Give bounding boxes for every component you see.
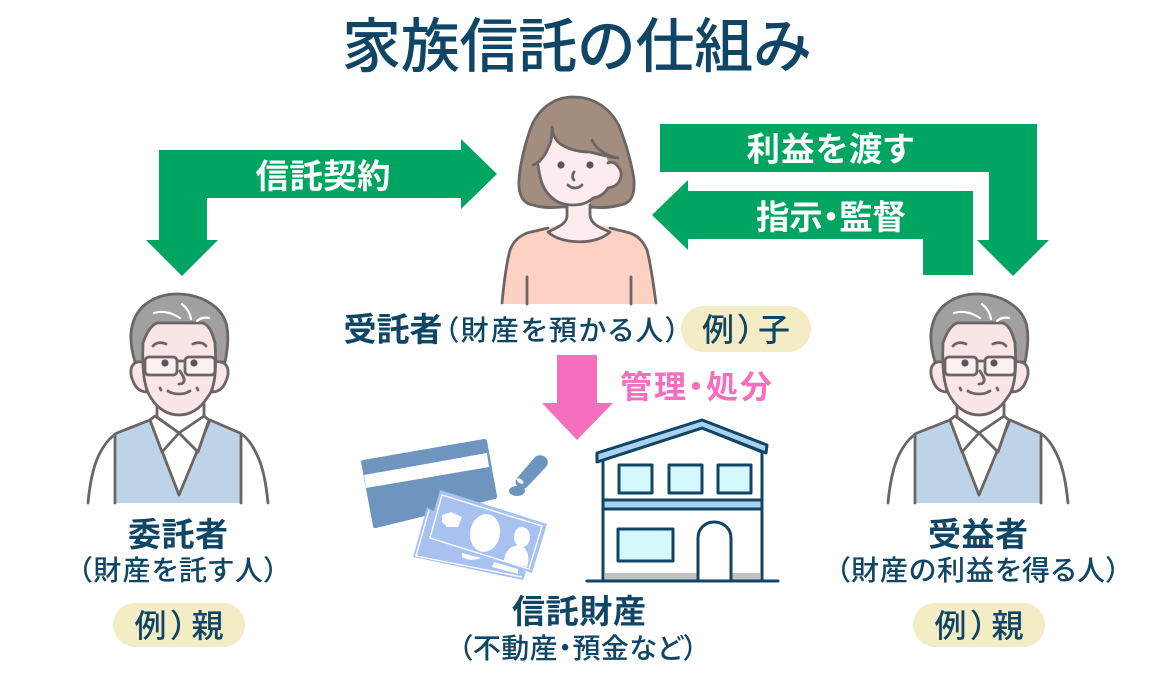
title: 家族信託の仕組み (342, 14, 812, 80)
badge: example parent right (913, 603, 1045, 647)
label: settlor: （財産を託す人） (78, 555, 278, 586)
arrow label: pass benefits: 利益を渡す (746, 132, 914, 169)
label: trustee (344, 311, 680, 348)
icon: bank card, seal and banknotes (361, 439, 548, 580)
label: manage and dispose: 管理・処分 (620, 369, 772, 405)
badge: example parent left (113, 603, 245, 647)
badge: example parent left: 例）親 (134, 608, 224, 644)
figure: trustee woman (502, 97, 656, 304)
badge: example parent right: 例）親 (934, 608, 1024, 644)
arrow: manage and dispose (542, 355, 613, 440)
label: beneficiary: 受益者 (928, 516, 1028, 553)
arrow label: trust contract: 信託契約 (256, 159, 390, 196)
icon: house (587, 420, 778, 581)
icon: banknotes (413, 490, 547, 580)
label: beneficiary: （財産の利益を得る人） (836, 555, 1120, 586)
badge: example child: 例）子 (702, 312, 790, 348)
label: trustee: （財産を預かる人） (444, 315, 680, 346)
label: trust property (458, 593, 698, 664)
arrow: instructions and supervision (652, 180, 973, 275)
label: trustee: 受託者 (344, 311, 442, 348)
arrow label: instructions and supervision: 指示・監督 (756, 200, 906, 237)
icon: bank card (361, 439, 497, 528)
label: settlor: 委託者 (128, 516, 228, 553)
label: trust property: 信託財産 (512, 593, 646, 630)
figure: settlor man (88, 294, 268, 503)
figure: beneficiary man (888, 294, 1068, 503)
label: trust property: （不動産・預金など） (458, 633, 698, 664)
badge: example child (681, 306, 811, 352)
icon: seal (509, 455, 548, 496)
label: beneficiary (836, 516, 1120, 586)
arrow: pass benefits (660, 124, 1049, 276)
arrow: trust contract (146, 139, 497, 276)
label: settlor (78, 516, 278, 586)
